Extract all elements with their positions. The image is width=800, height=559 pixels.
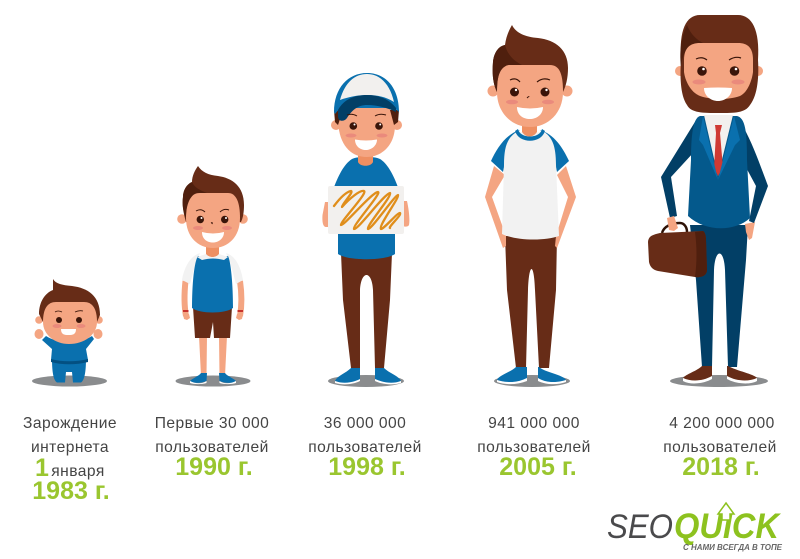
logo: SEOQUICK: SEO [607, 508, 673, 546]
caption: 1990 [155, 415, 269, 481]
caption: 1983: 1983 г. [32, 477, 110, 505]
logo: SEOQUICK [607, 503, 782, 552]
caption: 1983: января [51, 463, 105, 480]
figure: bearded man in suit 2018 [648, 15, 768, 387]
caption: 2018: 2018 г. [682, 453, 760, 481]
caption: 2005 [477, 415, 591, 481]
caption: 1998: 36 000 000 [324, 415, 406, 432]
caption: 1983: 1 [35, 454, 49, 482]
caption: 1990: пользователей [155, 439, 269, 456]
caption: 1998: пользователей [308, 439, 422, 456]
logo: SEOQUICK: QUICK [674, 507, 782, 546]
caption: 1983 [23, 415, 117, 505]
caption: 1983: интернета [31, 439, 109, 456]
figure: young man 2005 [485, 25, 576, 387]
caption: 2018: 4 200 000 000 [669, 415, 775, 432]
caption: 1998 [308, 415, 422, 481]
caption: 2018 [663, 415, 777, 481]
caption: 2005: пользователей [477, 439, 591, 456]
caption: 2018: пользователей [663, 439, 777, 456]
figure: teen with cap 1998 [322, 73, 409, 387]
figure: baby 1983 [32, 279, 107, 386]
logo: SEOQUICK: С НАМИ ВСЕГДА В ТОПЕ [683, 542, 782, 552]
briefcase [648, 216, 707, 277]
scribble [334, 191, 400, 229]
caption: 1998: 1998 г. [328, 453, 406, 481]
caption: 2005: 2005 г. [499, 453, 577, 481]
caption: 1983: Зарождение [23, 415, 117, 432]
caption: 2005: 941 000 000 [488, 415, 580, 432]
caption: 1990: 1990 г. [175, 453, 253, 481]
caption: 1990: Первые 30 000 [155, 415, 269, 432]
figure: boy 1990 [176, 166, 250, 386]
